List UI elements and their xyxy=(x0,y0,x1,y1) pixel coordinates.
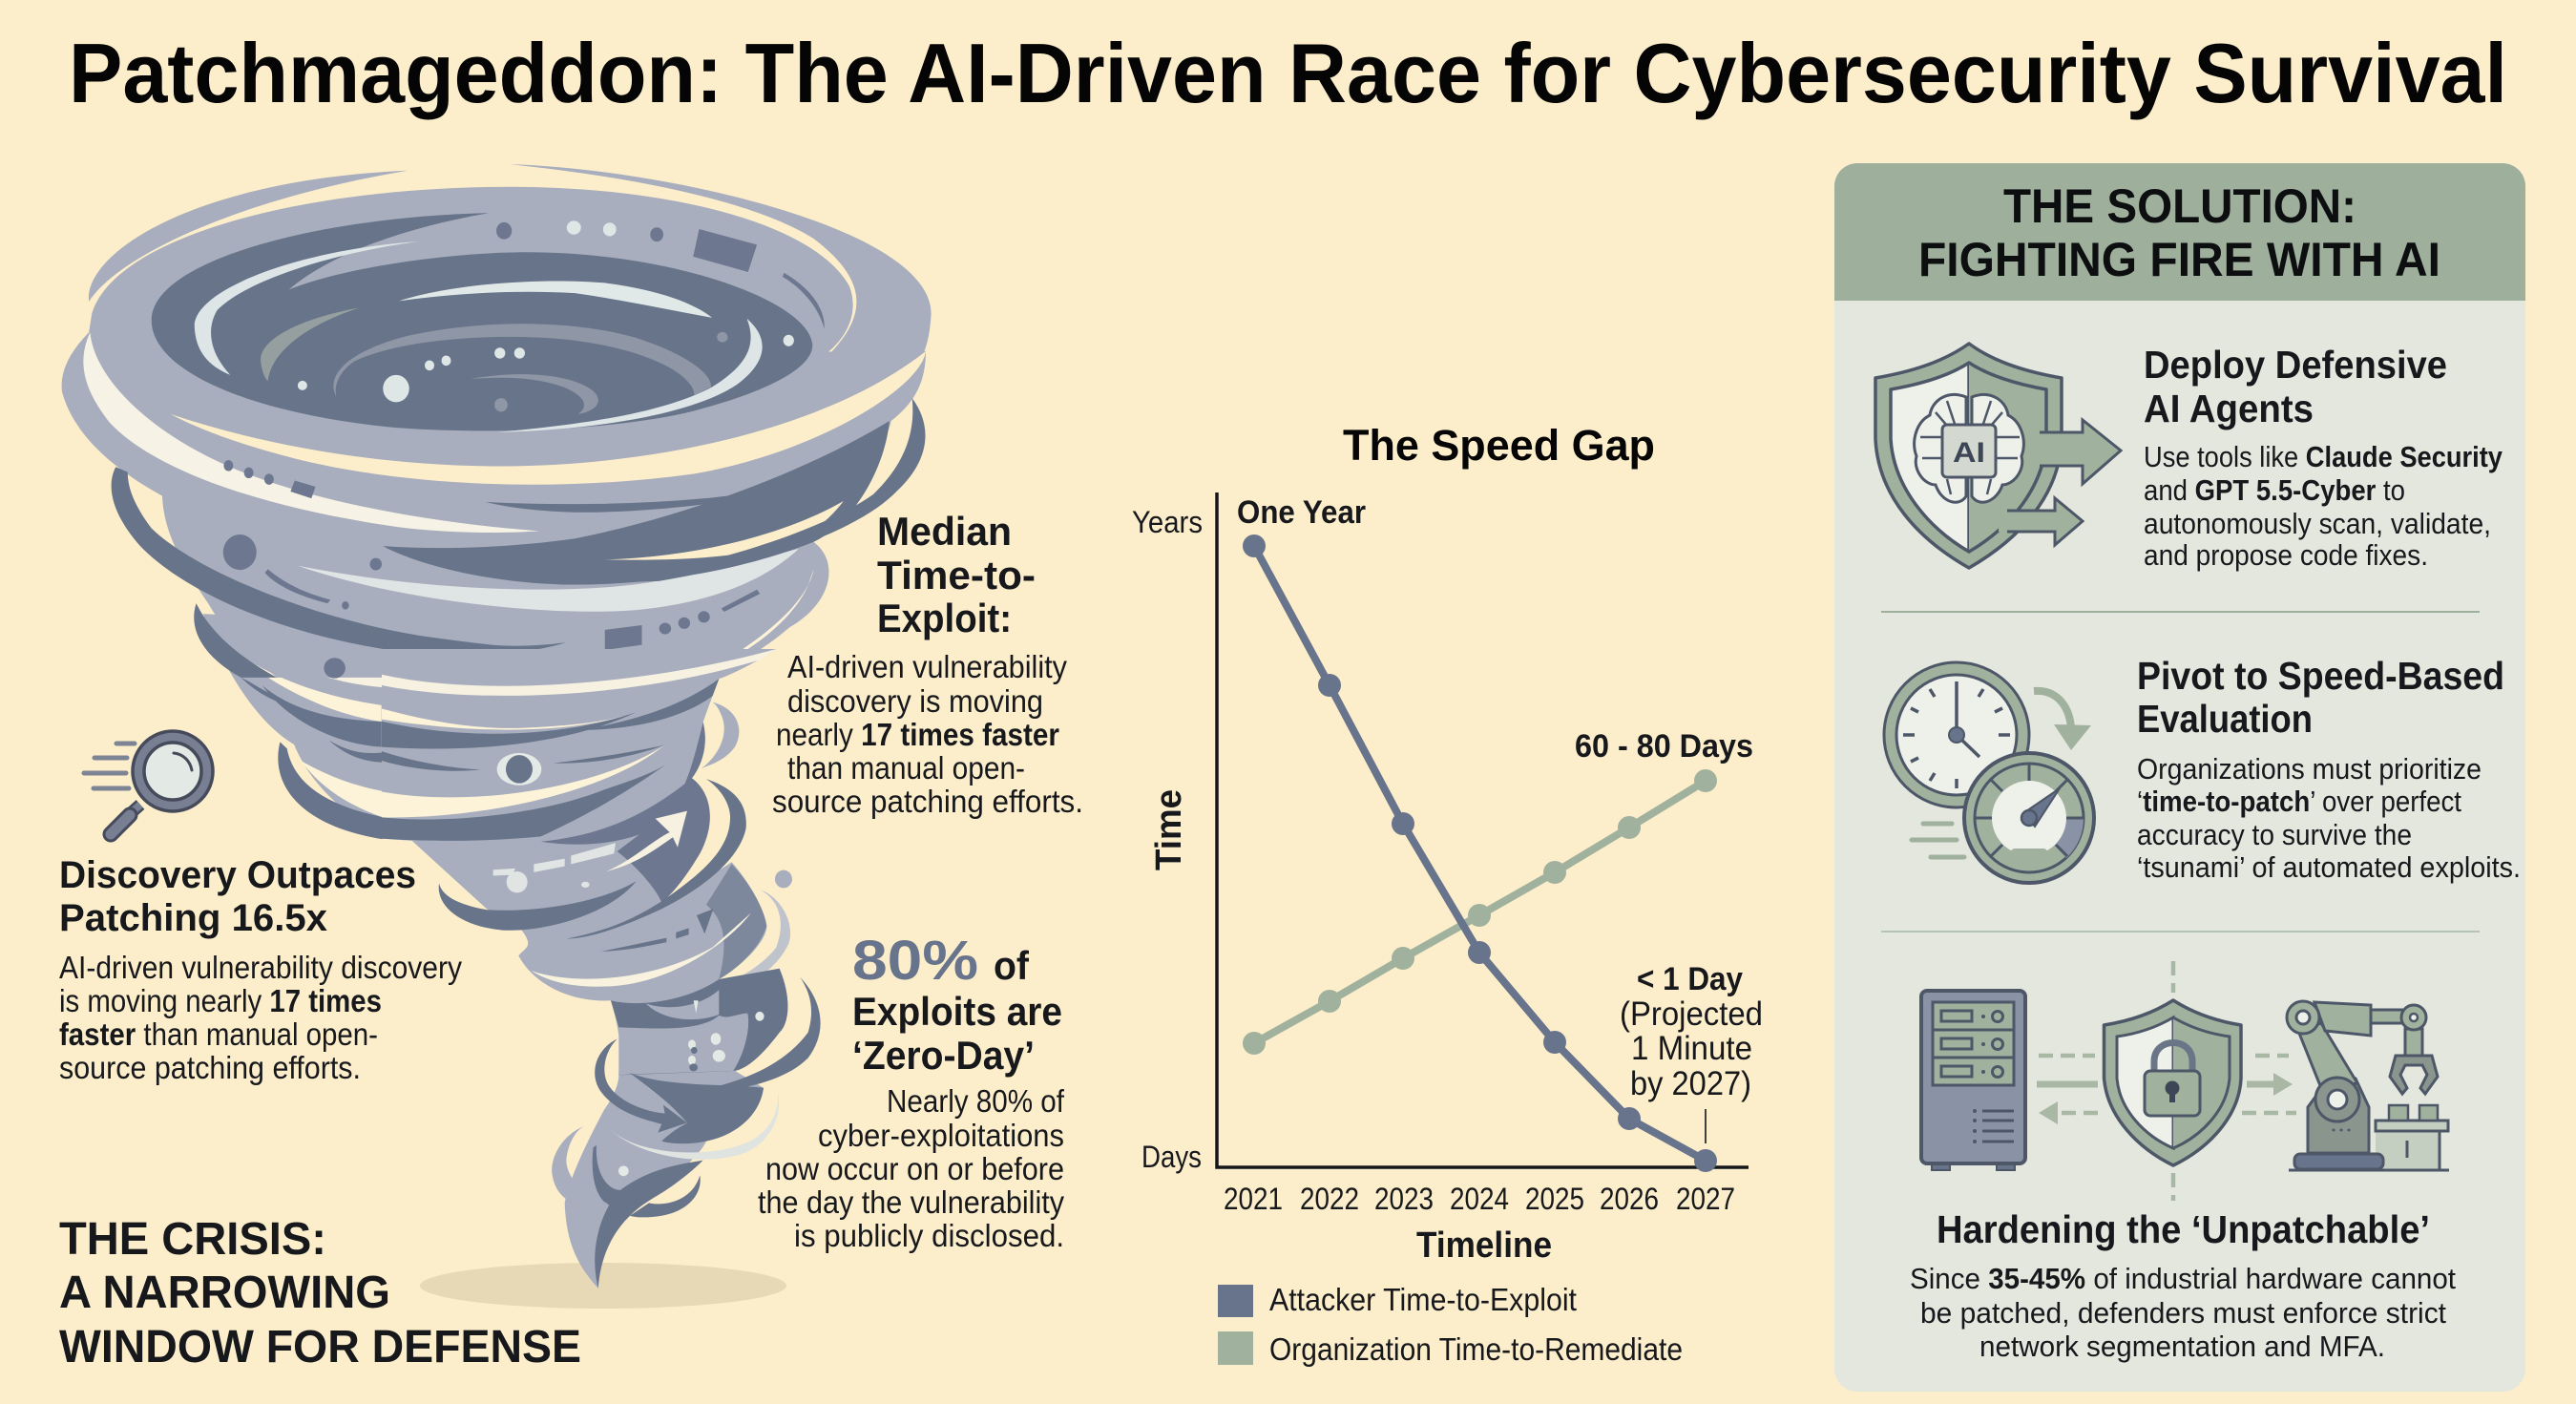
heading: the crisis: WINDOW FOR DEFENSE xyxy=(59,1322,581,1373)
x-axis labels: 2021 xyxy=(1224,1182,1283,1216)
text block: discovery outpaces patching: AI-driven vulnerability discovery xyxy=(59,950,462,985)
x-axis labels: Timeline xyxy=(1416,1226,1552,1266)
legend: Organization Time-to-Remediate xyxy=(1269,1331,1683,1367)
legend xyxy=(1218,1282,1683,1367)
text block: 80% zero-day: 80% xyxy=(852,930,978,992)
text block: median time-to-exploit: Median xyxy=(877,509,1012,554)
y-axis labels xyxy=(1132,505,1203,1174)
lock shield xyxy=(2104,1000,2241,1165)
text block: 80% zero-day: now occur on or before xyxy=(765,1151,1064,1186)
text block: discovery outpaces patching: Discovery Outpaces xyxy=(59,854,416,896)
dark funnel rings xyxy=(566,779,746,939)
text block: discovery outpaces patching: is moving nearly 17 times xyxy=(59,983,382,1018)
x-axis labels: 2026 xyxy=(1600,1182,1659,1216)
data callouts: by 2027) xyxy=(1630,1065,1751,1102)
y-axis labels: Time xyxy=(1149,789,1189,870)
series: organization time-to-remediate xyxy=(1243,769,1717,1055)
tornado mid-section xyxy=(203,614,504,843)
solution: pivot to speed-based evaluation: Organizations must prioritize xyxy=(2137,752,2482,786)
tornado illustration xyxy=(62,164,932,1309)
text block: median time-to-exploit: Exploit: xyxy=(877,596,1012,640)
axes xyxy=(1217,492,1749,1167)
icon: magnifying glass xyxy=(84,731,213,834)
solution: hardening the unpatchable xyxy=(1910,1207,2456,1363)
solution: deploy defensive AI agents xyxy=(2144,343,2503,572)
data callouts: < 1 Day xyxy=(1637,961,1743,997)
text block: 80% zero-day: Exploits are xyxy=(852,989,1062,1034)
text block: 80% zero-day: cyber-exploitations xyxy=(818,1118,1064,1153)
solution: hardening the unpatchable: Hardening the ‘Unpatchable’ xyxy=(1937,1207,2430,1251)
text block: median time-to-exploit xyxy=(772,509,1083,819)
text block: 80% zero-day xyxy=(758,930,1065,1253)
heading: the crisis xyxy=(59,1214,581,1373)
x-axis labels: 2022 xyxy=(1300,1182,1359,1216)
solution: pivot to speed-based evaluation xyxy=(2137,654,2521,884)
panel header: FIGHTING FIRE WITH AI xyxy=(1918,233,2440,286)
icon: AI shield with arrows xyxy=(1875,344,2121,568)
solution: hardening the unpatchable: network segmentation and MFA. xyxy=(1979,1330,2385,1363)
tornado top disc xyxy=(62,164,932,679)
data dots and chips on disc xyxy=(223,222,825,679)
solution: deploy defensive AI agents: AI Agents xyxy=(2144,387,2314,430)
x-axis labels xyxy=(1224,1182,1735,1266)
solution: deploy defensive AI agents: Use tools like Claude Security xyxy=(2144,440,2503,473)
data callouts xyxy=(1237,494,1763,1143)
icon: segmented server, lock shield and robot arm xyxy=(1921,961,2449,1201)
text block: 80% zero-day: of xyxy=(994,943,1030,988)
text block: discovery outpaces patching: Patching 16.5x xyxy=(59,897,327,939)
text block: median time-to-exploit: source patching efforts. xyxy=(772,784,1083,819)
solution: hardening the unpatchable: be patched, defenders must enforce strict xyxy=(1920,1296,2446,1330)
dark arrow ring xyxy=(595,1038,687,1133)
solution: deploy defensive AI agents: and propose code fixes. xyxy=(2144,538,2428,572)
data callouts: One Year xyxy=(1237,494,1366,531)
text block: 80% zero-day: ‘Zero-Day’ xyxy=(852,1033,1035,1078)
x-axis labels: 2025 xyxy=(1525,1182,1584,1216)
legend: Attacker Time-to-Exploit xyxy=(1269,1282,1577,1317)
solution: deploy defensive AI agents: Deploy Defensive xyxy=(2144,343,2447,387)
solution: hardening the unpatchable: Since 35-45% of industrial hardware cannot xyxy=(1910,1262,2456,1295)
icon: AI shield with arrows: AI xyxy=(1953,437,1985,469)
text block: 80% zero-day: is publicly disclosed. xyxy=(794,1218,1064,1253)
y-axis labels: Days xyxy=(1141,1140,1202,1174)
title: Patchmageddon: The AI-Driven Race for Cybersecurity Survival xyxy=(69,26,2507,120)
middle dark segment xyxy=(611,969,787,1075)
heading: the crisis: THE CRISIS: xyxy=(59,1214,326,1265)
text block: discovery outpaces patching xyxy=(59,854,462,1085)
data callouts: (Projected xyxy=(1620,995,1763,1033)
solution: pivot to speed-based evaluation: Evaluation xyxy=(2137,697,2313,741)
text block: median time-to-exploit: AI-driven vulnerability xyxy=(787,649,1067,684)
text block: 80% zero-day: the day the vulnerability xyxy=(758,1184,1064,1220)
panel: the solution xyxy=(1834,163,2525,1392)
server xyxy=(1921,991,2025,1170)
text block: median time-to-exploit: than manual open- xyxy=(787,750,1025,786)
solution: pivot to speed-based evaluation: Pivot to Speed-Based xyxy=(2137,654,2504,698)
tornado lower funnel xyxy=(382,649,821,1289)
x-axis labels: 2024 xyxy=(1450,1182,1509,1216)
data callouts: 1 Minute xyxy=(1631,1030,1752,1067)
solution: pivot to speed-based evaluation: ‘time-to-patch’ over perfect xyxy=(2137,785,2461,818)
icon: clock and gauge xyxy=(1884,662,2094,883)
text block: discovery outpaces patching: source patching efforts. xyxy=(59,1050,361,1085)
solution: pivot to speed-based evaluation: ‘tsunami’ of automated exploits. xyxy=(2137,850,2521,884)
robot arm xyxy=(2287,1001,2449,1170)
solution: pivot to speed-based evaluation: accuracy to survive the xyxy=(2137,818,2412,851)
solution: deploy defensive AI agents: and GPT 5.5-Cyber to xyxy=(2144,473,2405,507)
x-axis labels: 2027 xyxy=(1676,1182,1735,1216)
y-axis labels: Years xyxy=(1132,505,1203,539)
text block: median time-to-exploit: nearly 17 times faster xyxy=(776,717,1059,752)
series: attacker time-to-exploit xyxy=(1243,534,1717,1172)
text block: median time-to-exploit: Time-to- xyxy=(877,553,1036,597)
panel header: THE SOLUTION: xyxy=(2003,179,2356,233)
heading: the crisis: A NARROWING xyxy=(59,1268,390,1318)
text block: discovery outpaces patching: faster than manual open- xyxy=(59,1016,378,1052)
chart title: The Speed Gap xyxy=(1343,421,1655,470)
ring node xyxy=(497,753,541,786)
data callouts: 60 - 80 Days xyxy=(1575,728,1753,765)
funnel tip xyxy=(593,1145,703,1289)
chart: the speed gap xyxy=(1132,421,1763,1367)
funnel dots xyxy=(618,1012,764,1176)
flow arrows xyxy=(2037,961,2296,1201)
text block: median time-to-exploit: discovery is moving xyxy=(787,683,1043,719)
x-axis labels: 2023 xyxy=(1374,1182,1434,1216)
solution: deploy defensive AI agents: autonomously scan, validate, xyxy=(2144,507,2491,540)
white arrow xyxy=(606,811,687,871)
text block: 80% zero-day: Nearly 80% of xyxy=(887,1083,1065,1119)
lower dark segment xyxy=(630,1073,764,1143)
panel header xyxy=(1834,163,2525,301)
